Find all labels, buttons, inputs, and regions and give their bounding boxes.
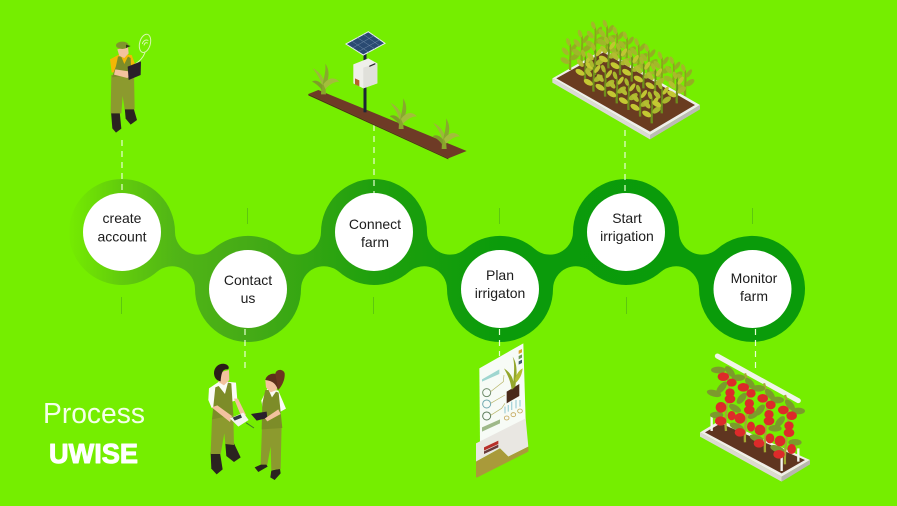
illustration: planning board	[476, 343, 528, 477]
step 3: connect farm: farm	[361, 234, 389, 250]
trellis bar	[717, 356, 798, 401]
logo: UWISE: UWISE	[49, 438, 138, 469]
step 4: plan irrigation: irrigaton	[475, 285, 525, 301]
illustration: tomato plants	[700, 356, 810, 482]
step 6: monitor farm: Monitor	[731, 270, 778, 286]
step 4: plan irrigation: Plan	[486, 267, 514, 283]
solar panel	[346, 32, 385, 55]
step 5: start irrigation: Start	[612, 210, 642, 226]
illustration: farmer with tablet	[110, 33, 153, 133]
step 5: start irrigation	[587, 193, 665, 271]
step 2: contact us: us	[241, 290, 255, 306]
step 2: contact us: Contact	[224, 272, 272, 288]
illustration: solar sensor in soil	[308, 32, 467, 159]
step 4: plan irrigation	[461, 250, 539, 328]
step 3: connect farm	[335, 193, 413, 271]
step 5: start irrigation: irrigation	[600, 228, 654, 244]
step 2: contact us	[209, 250, 287, 328]
farmer: woman	[251, 370, 286, 480]
tick marks	[122, 208, 752, 314]
farmer: man	[208, 364, 254, 474]
illustration: crop field bed	[552, 19, 700, 139]
heading: Process: Process	[43, 398, 145, 430]
dashed connector lines	[122, 125, 756, 372]
step 6: monitor farm	[714, 250, 792, 328]
step 1: create account: create	[103, 210, 142, 226]
step 1: create account	[83, 193, 161, 271]
step 6: monitor farm: farm	[740, 288, 768, 304]
step 1: create account: account	[97, 228, 147, 244]
process ribbon	[69, 179, 805, 342]
sensor post	[360, 53, 369, 112]
step 3: connect farm: Connect	[349, 216, 401, 232]
illustration: two farmers with controller	[208, 364, 286, 480]
sensor box	[353, 58, 377, 88]
